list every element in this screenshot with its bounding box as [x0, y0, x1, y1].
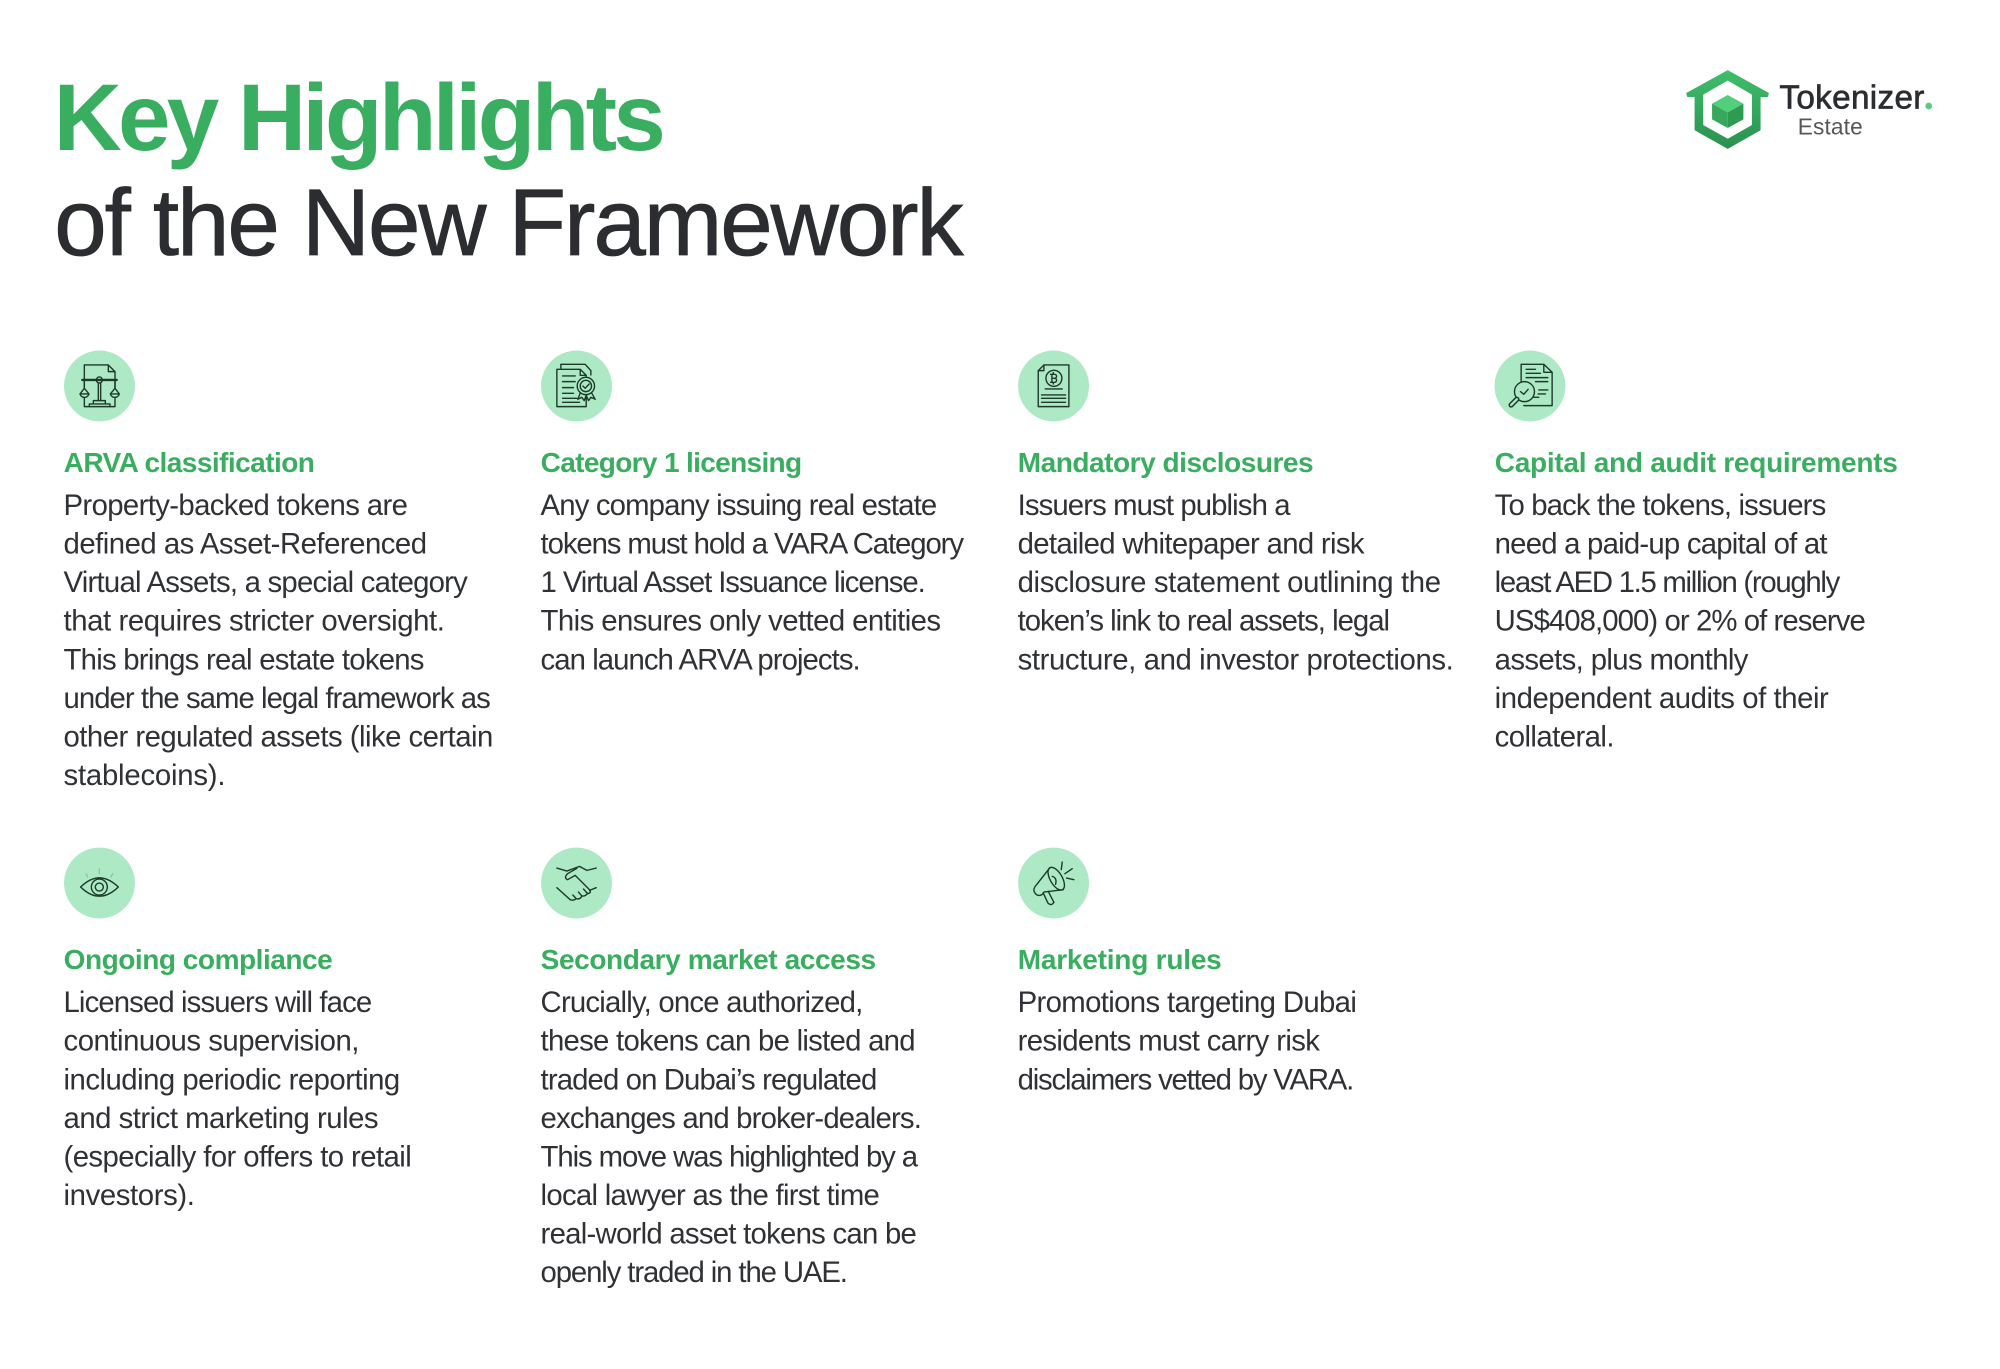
panel: Marketing rules: [1018, 848, 1357, 1096]
text block: including periodic reporting: [64, 1063, 400, 1096]
icon: audit magnifier on document: [1495, 351, 1565, 421]
text block: that requires stricter oversight.: [64, 605, 445, 638]
text block: This brings real estate tokens: [64, 643, 424, 676]
panel: Mandatory disclosures: [1018, 351, 1454, 676]
icon: megaphone: [1018, 848, 1089, 918]
heading: Secondary market access: [541, 944, 876, 975]
logo: Tokenizer Estate: [1687, 71, 1932, 148]
text block: tokens must hold a VARA Category: [541, 528, 964, 561]
text block: disclaimers vetted by VARA.: [1018, 1063, 1354, 1096]
text block: [541, 489, 964, 676]
text block: independent audits of their: [1495, 682, 1829, 715]
icon: legal document with scales: [64, 351, 135, 421]
text block: assets, plus monthly: [1495, 643, 1749, 676]
text block: continuous supervision,: [64, 1025, 359, 1058]
text block: Any company issuing real estate: [541, 489, 937, 522]
text block: Crucially, once authorized,: [541, 986, 863, 1019]
text block: Issuers must publish a: [1018, 489, 1291, 522]
text block: under the same legal framework as: [64, 682, 491, 715]
text block: structure, and investor protections.: [1018, 643, 1454, 676]
text block: collateral.: [1495, 721, 1615, 754]
icon: certified document: [541, 351, 612, 421]
text block: other regulated assets (like certain: [64, 721, 493, 754]
title: [54, 66, 964, 276]
title: of the New Framework: [54, 171, 964, 276]
text block: 1 Virtual Asset Issuance license.: [541, 566, 926, 599]
text block: [1495, 489, 1866, 754]
text block: defined as Asset-Referenced: [64, 528, 427, 561]
text block: residents must carry risk: [1018, 1025, 1320, 1058]
icon: eye: [64, 848, 135, 918]
panel: Category 1 licensing: [541, 351, 964, 676]
panel: ARVA classification: [64, 351, 493, 792]
panel: Secondary market access: [541, 848, 922, 1289]
panel: Capital and audit requirements: [1495, 351, 1898, 754]
text block: disclosure statement outlining the: [1018, 566, 1441, 599]
text block: real-world asset tokens can be: [541, 1218, 917, 1251]
heading: Capital and audit requirements: [1495, 447, 1898, 478]
heading: Mandatory disclosures: [1018, 447, 1314, 478]
text block: token’s link to real assets, legal: [1018, 605, 1390, 638]
text block: traded on Dubai’s regulated: [541, 1063, 877, 1096]
heading: Marketing rules: [1018, 944, 1222, 975]
text block: Promotions targeting Dubai: [1018, 986, 1357, 1019]
text block: least AED 1.5 million (roughly: [1495, 566, 1841, 599]
logo: Tokenizer Estate: Tokenizer: [1779, 79, 1924, 116]
text block: local lawyer as the first time: [541, 1179, 880, 1212]
text block: detailed whitepaper and risk: [1018, 528, 1365, 561]
text block: To back the tokens, issuers: [1495, 489, 1826, 522]
text block: Virtual Assets, a special category: [64, 566, 468, 599]
text block: can launch ARVA projects.: [541, 643, 861, 676]
text block: Property-backed tokens are: [64, 489, 408, 522]
text block: openly traded in the UAE.: [541, 1256, 848, 1289]
text block: [64, 489, 493, 792]
text block: [64, 986, 412, 1212]
text block: [1018, 986, 1357, 1096]
panel: Ongoing compliance: [64, 848, 412, 1212]
logo: Tokenizer Estate: Estate: [1798, 113, 1863, 139]
text block: (especially for offers to retail: [64, 1140, 412, 1173]
text block: need a paid-up capital of at: [1495, 528, 1828, 561]
text block: Licensed issuers will face: [64, 986, 372, 1019]
text block: [1018, 489, 1454, 676]
text block: This move was highlighted by a: [541, 1140, 919, 1173]
text block: US$408,000) or 2% of reserve: [1495, 605, 1866, 638]
icon: bitcoin document: [1018, 351, 1089, 421]
text block: investors).: [64, 1179, 195, 1212]
text block: these tokens can be listed and: [541, 1025, 916, 1058]
title: Key Highlights: [54, 66, 666, 171]
text block: This ensures only vetted entities: [541, 605, 941, 638]
heading: ARVA classification: [64, 447, 315, 478]
text block: and strict marketing rules: [64, 1102, 379, 1135]
icon: handshake: [541, 848, 612, 918]
text block: exchanges and broker-dealers.: [541, 1102, 922, 1135]
heading: Category 1 licensing: [541, 447, 802, 478]
text block: [541, 986, 922, 1289]
heading: Ongoing compliance: [64, 944, 333, 975]
text block: stablecoins).: [64, 759, 226, 792]
